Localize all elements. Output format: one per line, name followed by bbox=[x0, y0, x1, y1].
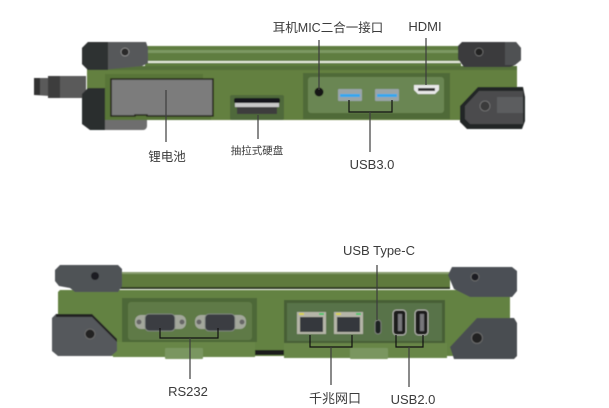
side body bbox=[87, 66, 517, 120]
label: HDMI: HDMI bbox=[408, 19, 442, 34]
rear body bbox=[58, 290, 510, 356]
USB 2.0 port 1 bbox=[393, 310, 406, 335]
side lid bbox=[145, 46, 461, 66]
label: gigabit LAN: 千兆网口 bbox=[309, 391, 361, 406]
rear left hinge bbox=[55, 265, 122, 292]
top left hinge bbox=[82, 42, 148, 70]
label: USB3.0: USB3.0 bbox=[350, 157, 394, 172]
right flap bbox=[284, 343, 447, 359]
USB 2.0 port 2 bbox=[415, 310, 428, 335]
lower right bumper bbox=[460, 87, 525, 129]
rear lower right bumper bbox=[450, 318, 517, 359]
COM port 2 bbox=[195, 314, 246, 331]
label: USB2.0: USB2.0 bbox=[391, 392, 435, 407]
battery bbox=[111, 79, 213, 116]
leader lines bbox=[160, 38, 426, 387]
rear lid bbox=[120, 272, 450, 289]
rear right hinge bbox=[448, 267, 517, 297]
LAN port 2 bbox=[334, 312, 363, 334]
top right hinge bbox=[458, 42, 521, 67]
battery bay bbox=[105, 74, 211, 120]
right port panel bbox=[284, 300, 445, 343]
lower left bumper bbox=[82, 88, 147, 130]
label: RS232: RS232 bbox=[168, 384, 208, 399]
COM port 1 bbox=[135, 314, 186, 331]
USB 3.0 port 2 bbox=[375, 89, 399, 101]
labels bbox=[148, 19, 442, 407]
rear lower left bumper bbox=[52, 314, 117, 356]
label: removable drive: 抽拉式硬盘 bbox=[231, 144, 284, 157]
side view of laptop with ports bbox=[34, 42, 525, 359]
label: battery: 锂电池 bbox=[148, 149, 186, 164]
left flap bbox=[113, 342, 255, 359]
handle bbox=[34, 76, 86, 98]
hard drive slot bbox=[230, 95, 284, 120]
USB Type-C port bbox=[375, 320, 381, 334]
label: USB Type-C: USB Type-C bbox=[343, 243, 415, 258]
label: headset and mic jack: 耳机MIC二合一接口 bbox=[273, 20, 383, 35]
HDMI port bbox=[414, 85, 439, 94]
LAN port 1 bbox=[297, 312, 326, 334]
audio jack bbox=[314, 88, 324, 96]
port panel bbox=[303, 73, 450, 119]
left port panel bbox=[122, 298, 257, 342]
USB 3.0 port 1 bbox=[338, 89, 362, 101]
